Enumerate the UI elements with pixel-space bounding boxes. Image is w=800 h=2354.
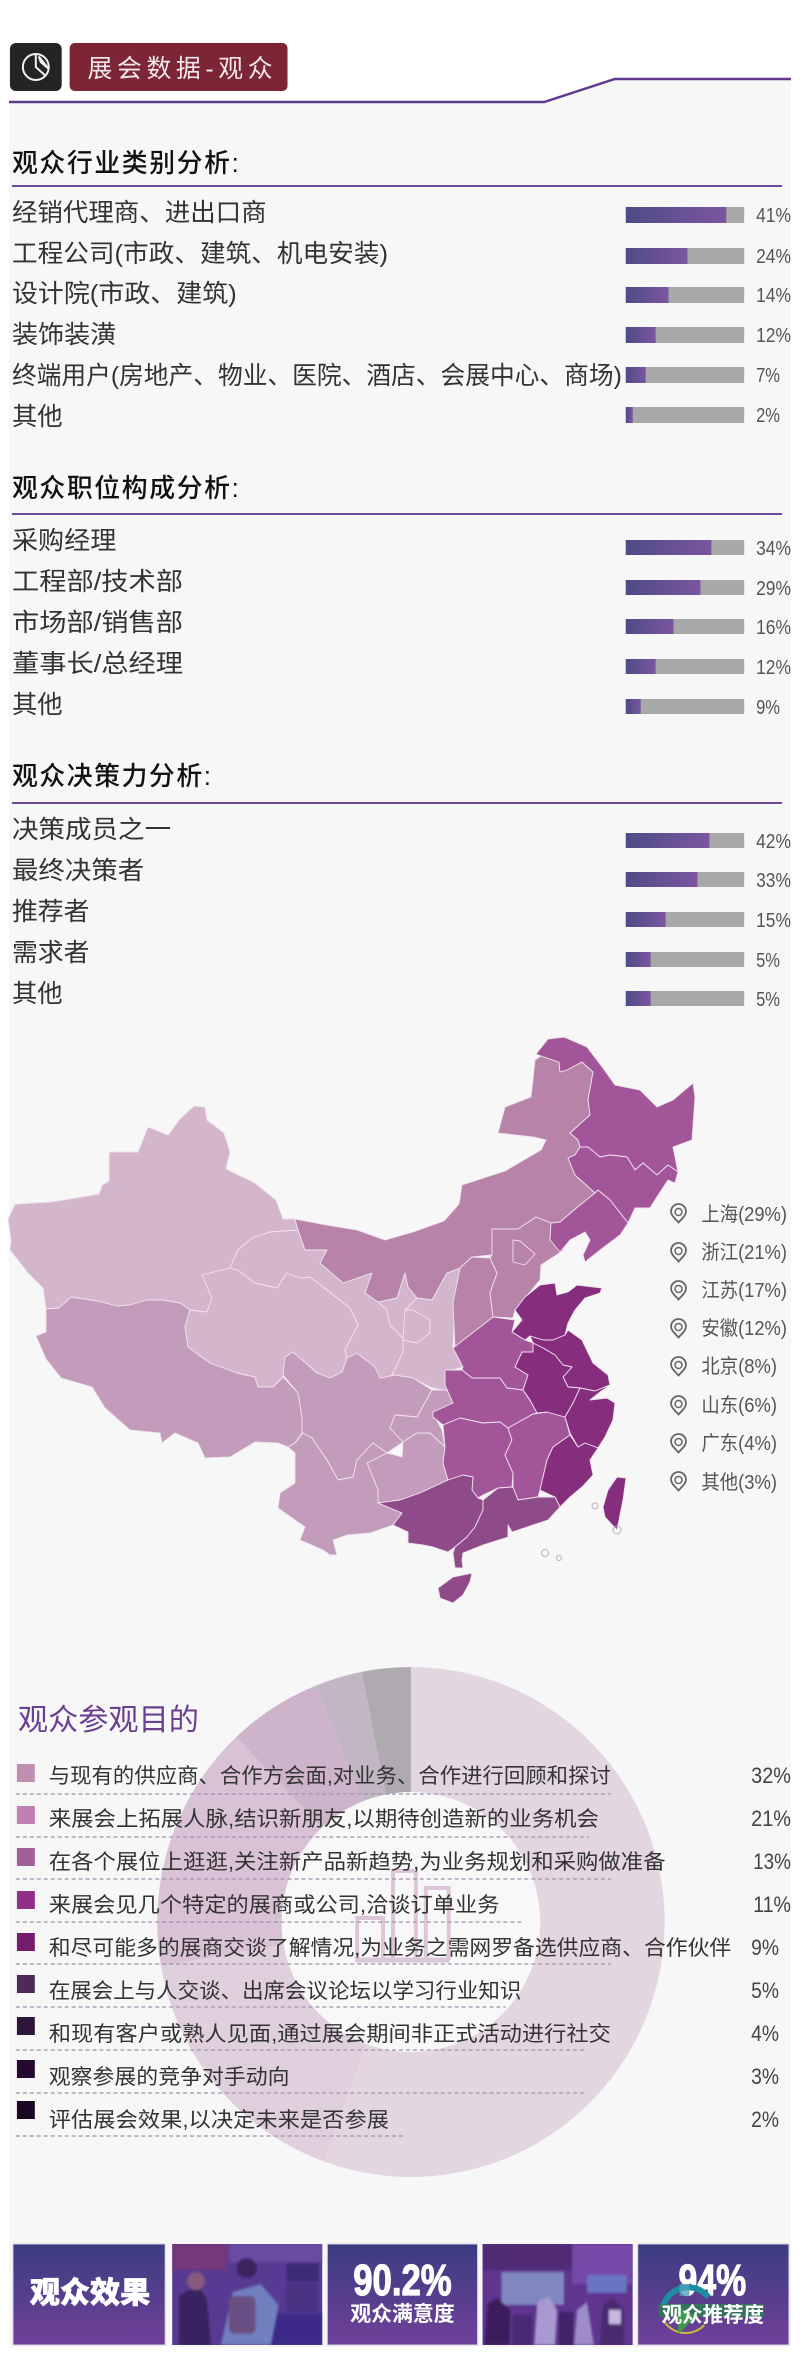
item 4: 11% (16, 1891, 791, 1922)
row: 装饰装潢 12%: 装饰装潢 (12, 321, 116, 349)
item 2: 21%: 来展会上拓展人脉,结识新朋友,以期待创造新的业务机会 (49, 1808, 599, 1831)
row: 其他 5% (12, 980, 780, 1011)
legend item: 山东 6% (671, 1394, 777, 1417)
section: 观众决策力分析 (12, 762, 791, 1011)
item 7: 4%: 4% (751, 2021, 779, 2046)
row: 需求者 5% (12, 939, 780, 972)
row: 董事长/总经理 12%: 12% (756, 657, 791, 679)
item 8: 3%: 观察参展的竞争对手动向 (49, 2066, 290, 2089)
legend: province shares (671, 1203, 787, 1494)
row: 其他 2%: 其他 (12, 403, 63, 431)
row: 推荐者 15% (12, 898, 791, 932)
legend item: 广东 4%: 广东(4%) (701, 1432, 777, 1455)
row: 其他 5%: 5% (756, 989, 780, 1011)
row: 经销代理商、进出口商 41%: 经销代理商、进出口商 (12, 199, 267, 227)
header rule (9, 79, 791, 102)
tile: 90.2% satisfaction (327, 2244, 478, 2345)
row: 决策成员之一 42%: 决策成员之一 (12, 816, 171, 844)
legend item: 浙江 21%: 浙江(21%) (701, 1241, 787, 1264)
item 6: 5%: 5% (751, 1978, 779, 2003)
row: 其他 5%: 其他 (12, 980, 63, 1008)
heading: 观众行业类别分析: (12, 149, 239, 178)
row: 决策成员之一 42%: 42% (756, 831, 791, 853)
tile: 90.2% satisfaction: 观众满意度 (350, 2302, 455, 2326)
section: 观众职位构成分析 (12, 474, 791, 719)
row: 其他 2%: 2% (756, 405, 780, 427)
row: 设计院 14%: 14% (756, 285, 791, 307)
heading badge: 展会数据-观众 (70, 43, 288, 91)
row: 市场部/销售部 16% (12, 609, 791, 639)
tile: 94% recommendation with watermark: 观众推荐度 (662, 2304, 764, 2327)
legend item: 上海 29% (671, 1203, 787, 1226)
row: 工程公司 24%: 工程公司(市政、建筑、机电安装) (12, 240, 388, 268)
row: 终端用户 7%: 7% (756, 365, 780, 387)
item 6: 5% (16, 1975, 779, 2007)
row: 设计院 14%: 设计院(市政、建筑) (12, 280, 237, 308)
row: 采购经理 34%: 34% (756, 538, 791, 560)
photo tile: visitors talking (172, 2244, 322, 2345)
tile: 观众效果: 观众效果 (30, 2277, 150, 2310)
tile: 观众效果 (13, 2244, 165, 2345)
item 9: 2% (16, 2101, 779, 2136)
row: 推荐者 15%: 15% (756, 910, 791, 932)
row: 市场部/销售部 16%: 16% (756, 617, 791, 639)
item 8: 3% (16, 2060, 779, 2093)
row: 装饰装潢 12% (12, 321, 791, 349)
item 1: 32% (16, 1763, 791, 1794)
legend item: 广东 4% (671, 1432, 777, 1455)
row: 设计院 14% (12, 280, 791, 308)
tile: 90.2% satisfaction: 90.2% (353, 2256, 452, 2305)
legend item: 浙江 21% (671, 1241, 787, 1264)
row: 工程部/技术部 29% (12, 568, 791, 600)
photo tile: exhibition hall (483, 2244, 633, 2345)
item 2: 21%: 21% (751, 1806, 791, 1831)
legend item: 其他 3%: 其他(3%) (701, 1471, 777, 1494)
item 1: 32%: 与现有的供应商、合作方会面,对业务、合作进行回顾和探讨 (49, 1765, 611, 1788)
row: 推荐者 15%: 推荐者 (12, 898, 90, 926)
legend item: 山东 6%: 山东(6%) (701, 1394, 777, 1417)
item 3: 13% (16, 1848, 791, 1879)
row: 最终决策者 33% (12, 857, 791, 892)
heading: 观众决策力分析: (12, 762, 211, 791)
row: 工程部/技术部 29%: 工程部/技术部 (12, 568, 183, 596)
item 5: 9%: 和尽可能多的展商交谈了解情况,为业务之需网罗备选供应商、合作伙伴 (49, 1937, 731, 1960)
tile: 94% recommendation with watermark: 94% (679, 2256, 746, 2305)
row: 市场部/销售部 16%: 市场部/销售部 (12, 609, 183, 637)
legend item: 江苏 17%: 江苏(17%) (701, 1279, 787, 1302)
item 6: 5%: 在展会上与人交谈、出席会议论坛以学习行业知识 (49, 1980, 521, 2003)
row: 其他 2% (12, 403, 780, 431)
legend item: 其他 3% (671, 1471, 777, 1494)
item 2: 21% (16, 1806, 791, 1837)
legend item: 安徽 12% (671, 1317, 787, 1340)
row: 工程公司 24% (12, 240, 791, 268)
row: 董事长/总经理 12%: 董事长/总经理 (12, 650, 183, 678)
map: China provinces choropleth (8, 1037, 695, 1603)
item 5: 9%: 9% (751, 1935, 779, 1960)
row: 其他 9%: 9% (756, 697, 780, 719)
legend item: 安徽 12%: 安徽(12%) (701, 1317, 787, 1340)
row: 装饰装潢 12%: 12% (756, 325, 791, 347)
item 3: 13%: 在各个展位上逛逛,关注新产品新趋势,为业务规划和采购做准备 (49, 1851, 666, 1874)
row: 最终决策者 33%: 最终决策者 (12, 857, 144, 885)
legend item: 上海 29%: 上海(29%) (701, 1203, 787, 1226)
row: 其他 9% (12, 691, 780, 719)
heading: 观众职位构成分析: (12, 474, 239, 503)
legend item: 北京 8%: 北京(8%) (701, 1355, 777, 1378)
section: 观众行业类别分析 (12, 149, 791, 431)
item 7: 4% (16, 2017, 779, 2050)
item 8: 3%: 3% (751, 2064, 779, 2089)
row: 需求者 5%: 需求者 (12, 939, 90, 967)
item 9: 2%: 2% (751, 2107, 779, 2132)
icon: pie chart badge (10, 43, 62, 91)
list: visit purposes (16, 1763, 791, 2136)
item 4: 11%: 11% (753, 1892, 791, 1917)
row: 工程部/技术部 29%: 29% (756, 578, 791, 600)
tile: 94% recommendation with watermark (638, 2244, 789, 2345)
item 4: 11%: 来展会见几个特定的展商或公司,洽谈订单业务 (49, 1894, 499, 1917)
item 3: 13%: 13% (753, 1849, 791, 1874)
donut chart: visit purpose (157, 1667, 665, 2177)
item 9: 2%: 评估展会效果,以决定未来是否参展 (49, 2109, 389, 2132)
row: 采购经理 34%: 采购经理 (12, 527, 116, 555)
item 1: 32%: 32% (751, 1763, 791, 1788)
legend item: 北京 8% (671, 1355, 777, 1378)
legend item: 江苏 17% (671, 1279, 787, 1302)
row: 最终决策者 33%: 33% (756, 870, 791, 892)
row: 董事长/总经理 12% (12, 650, 791, 679)
item 7: 4%: 和现有客户或熟人见面,通过展会期间非正式活动进行社交 (49, 2023, 611, 2046)
row: 终端用户 7%: 终端用户(房地产、物业、医院、酒店、会展中心、商场) (12, 362, 622, 390)
row: 决策成员之一 42% (12, 816, 791, 853)
title: 观众参观目的: 观众参观目的 (18, 1704, 199, 1737)
icon: globe watermark (659, 2284, 764, 2334)
row: 采购经理 34% (12, 527, 791, 560)
heading badge: 展会数据-观众: 展会数据-观众 (88, 55, 273, 83)
header (10, 43, 288, 91)
row: 经销代理商、进出口商 41%: 41% (756, 205, 791, 227)
row: 经销代理商、进出口商 41% (12, 199, 791, 227)
row: 工程公司 24%: 24% (756, 246, 791, 268)
row: 需求者 5%: 5% (756, 950, 780, 972)
lower content (13, 1203, 791, 2345)
row: 其他 9%: 其他 (12, 691, 63, 719)
item 5: 9% (16, 1933, 779, 1964)
icon: bar chart in donut hole (355, 1871, 450, 1960)
